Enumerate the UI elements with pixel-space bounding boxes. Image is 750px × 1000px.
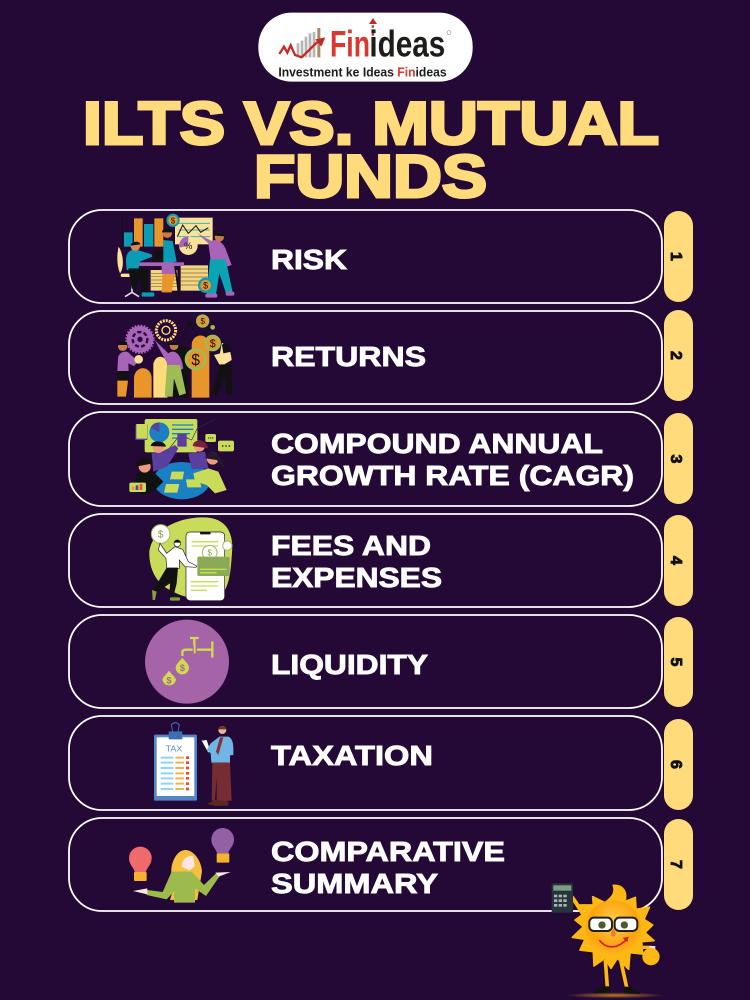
badge: 4 xyxy=(664,515,693,606)
icon: returns team with gears: $ xyxy=(191,352,200,369)
title: ILTS VS. MUTUAL xyxy=(83,90,659,157)
heading: fees and expenses: EXPENSES xyxy=(271,562,442,593)
badge: 4: 4 xyxy=(667,556,684,565)
heading: liquidity: LIQUIDITY xyxy=(271,649,428,680)
heading: taxation: TAXATION xyxy=(271,740,433,771)
panel: fees and expenses xyxy=(69,514,662,607)
badge: 2 xyxy=(664,310,693,401)
panel: risk xyxy=(69,210,662,303)
panel: comparative summary xyxy=(69,818,662,911)
panel: taxation xyxy=(69,716,662,810)
badge: 3: 3 xyxy=(667,455,684,464)
logo: Fin xyxy=(330,23,370,65)
icon: risk team at desk: $ xyxy=(171,216,176,225)
badge: 7 xyxy=(664,819,693,910)
icon: tax clipboard with man: TAX xyxy=(166,743,183,753)
icon: tap dripping money: $ xyxy=(180,663,185,673)
heading: risk: RISK xyxy=(271,244,347,275)
icon: risk team at desk: $ xyxy=(203,281,208,291)
badge: 7: 7 xyxy=(667,860,684,869)
heading: comparative summary: COMPARATIVE xyxy=(271,836,505,867)
badge: 1 xyxy=(664,211,693,302)
icon: woman with two bulbs xyxy=(129,828,234,903)
icon: returns team with gears xyxy=(117,314,232,398)
icon: tap dripping money: $ xyxy=(166,675,171,685)
heading: CAGR xyxy=(271,428,634,491)
icon: team at round table xyxy=(129,419,234,499)
heading: comparative summary: SUMMARY xyxy=(271,868,438,899)
badge: 5 xyxy=(664,617,693,707)
heading: fees and expenses: FEES AND xyxy=(271,530,431,561)
icon: returns team with gears: $ xyxy=(210,338,216,350)
heading: CAGR: COMPOUND ANNUAL xyxy=(271,428,603,459)
badge: 6 xyxy=(664,719,693,810)
heading: CAGR: GROWTH RATE (CAGR) xyxy=(271,460,634,491)
icon: risk team at desk xyxy=(117,214,234,298)
icon: phone with credit card xyxy=(149,517,232,601)
heading: fees and expenses xyxy=(271,530,442,593)
logo: Investment ke Ideas Finideas xyxy=(278,66,447,80)
badge: 5: 5 xyxy=(667,658,684,667)
logo: ideas xyxy=(369,23,445,65)
panel: liquidity xyxy=(69,615,662,708)
icon: returns team with gears: $ xyxy=(200,317,205,326)
badge: 6: 6 xyxy=(667,760,684,769)
badge: 1: 1 xyxy=(667,252,684,261)
title: FUNDS xyxy=(254,143,487,210)
mascot: sun with calculator xyxy=(552,883,665,998)
icon: phone with credit card: $ xyxy=(158,529,164,540)
logo xyxy=(258,13,473,82)
badge: 2: 2 xyxy=(667,351,684,360)
title xyxy=(83,90,659,210)
icon: risk team at desk: % xyxy=(184,241,192,251)
icon: tax clipboard with man xyxy=(154,723,233,806)
badge: 3 xyxy=(664,413,693,504)
heading: returns: RETURNS xyxy=(271,341,426,372)
icon: tap dripping money xyxy=(145,620,229,704)
icon: phone with credit card: $ xyxy=(207,549,212,558)
panel: returns xyxy=(69,311,662,404)
panel: CAGR xyxy=(69,412,662,506)
heading: comparative summary xyxy=(271,836,505,899)
